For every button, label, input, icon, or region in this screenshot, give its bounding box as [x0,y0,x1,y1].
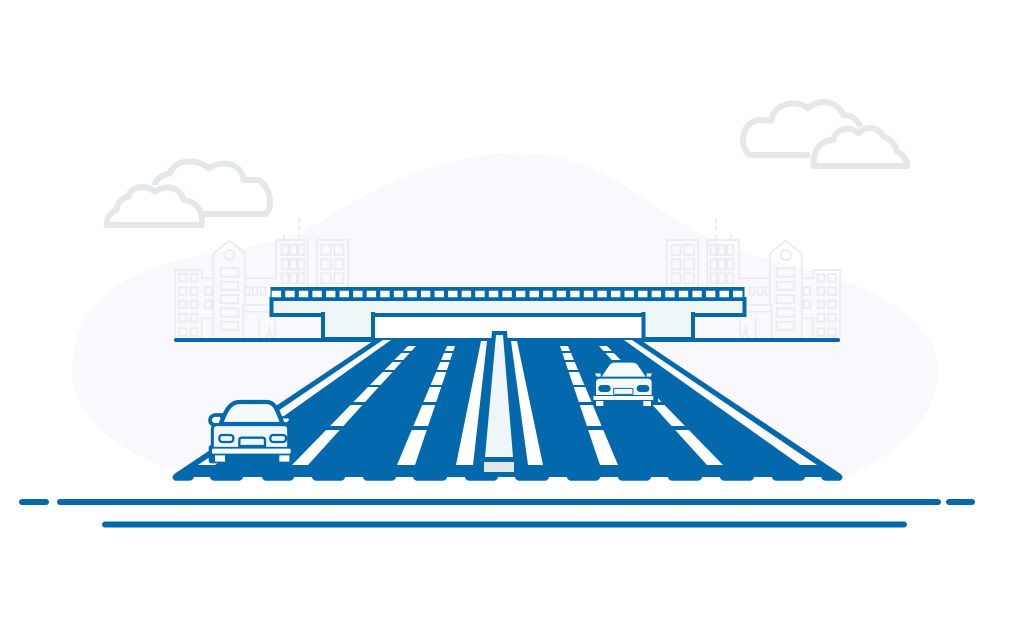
wheels [596,401,651,406]
car body [212,425,289,448]
left pier [323,314,373,339]
underbody [209,445,292,463]
mirrors [595,373,652,377]
car body [596,379,652,395]
bridge beam [272,299,744,315]
right headlight [637,385,649,392]
car: right, far lane [592,360,658,406]
ground line [176,338,838,342]
pier tops light fill right [646,311,691,317]
bumper [212,449,291,454]
foreground road lines [22,502,972,524]
headlights [598,385,611,392]
bridge top rail [270,287,744,300]
pier tops light fill [325,311,371,317]
road surface [172,339,842,481]
road edge lines [198,340,817,465]
bumper [593,396,653,400]
railing openings [272,291,743,297]
bridge underside opening [373,316,643,340]
mirrors [210,415,223,425]
roof and windshield [221,402,283,424]
overpass bridge [270,287,744,340]
headlights [219,435,233,442]
lane dashes: left side [292,346,455,465]
median barrier [481,331,518,472]
centre lane lines [456,341,543,465]
right headlight [270,435,286,442]
car: left, near lane [209,402,292,463]
city skyline: left [175,218,348,338]
background blob [72,153,938,477]
wheels [215,455,289,462]
cloud group: left [107,161,270,225]
right mirror [280,417,290,423]
grille [614,388,633,394]
grille [239,438,265,446]
cloud group: right [743,102,907,166]
right pier [644,314,693,339]
city skyline: right [667,218,840,338]
windshield [602,363,646,377]
car halo [592,360,658,404]
lane dashes: right side [560,346,723,465]
